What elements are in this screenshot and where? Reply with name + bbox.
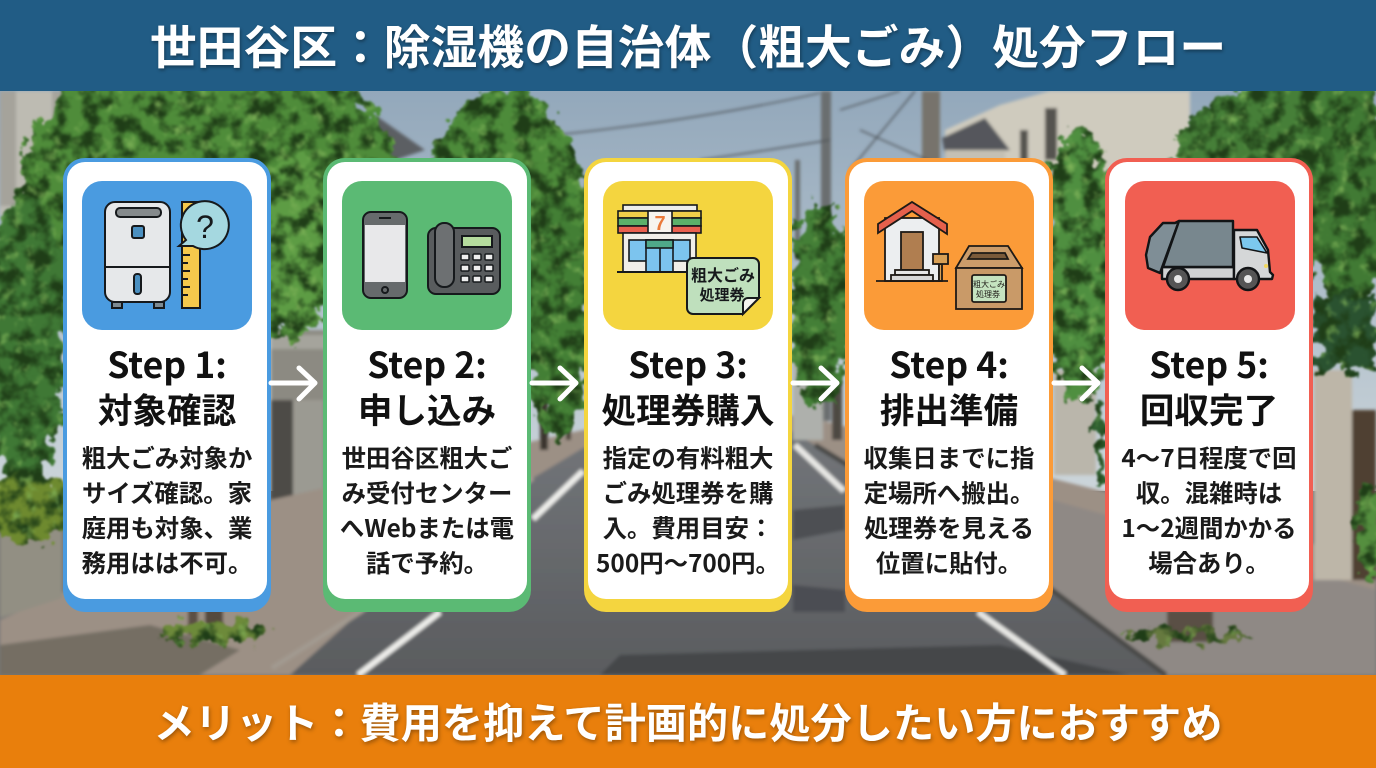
right wall	[1314, 370, 1352, 580]
step description: サイズ確認。家	[82, 475, 252, 510]
icon: dehumidifier, ruler and question bubble: ?	[196, 209, 214, 245]
step name: 排出準備	[880, 383, 1018, 433]
background photo: residential street	[0, 91, 1376, 675]
step name: 申し込み	[358, 383, 496, 433]
icon: convenience store and ticket	[603, 181, 773, 330]
step description: へWebまたは電	[340, 510, 514, 545]
left buildings	[0, 91, 52, 216]
step heading: Step 4:	[889, 338, 1009, 389]
title banner	[0, 0, 1376, 91]
step description: ごみ処理券を購	[603, 475, 773, 510]
ground: sidewalks	[0, 415, 1376, 675]
arrow: step 2 to 3	[530, 366, 578, 402]
trunks	[188, 605, 198, 635]
step description: 収。混雑時は	[1136, 475, 1282, 510]
step description: み受付センター	[342, 475, 512, 510]
step heading: Step 1:	[107, 338, 227, 389]
icon: house and box with ticket: 処理券	[976, 289, 1000, 300]
step description: 500円～700円。	[596, 545, 780, 580]
step description: 入。費用目安：	[603, 510, 773, 545]
right buildings	[945, 91, 1190, 210]
panel: step 1	[63, 158, 271, 612]
icon: smartphone and desk phone	[342, 181, 512, 330]
step description: 粗大ごみ対象か	[82, 440, 252, 475]
step name: 処理券購入	[602, 383, 774, 433]
road shadows	[793, 505, 845, 540]
step name: 対象確認	[98, 383, 236, 433]
panel: step 2	[323, 158, 531, 612]
step description: 話で予約。	[366, 545, 488, 580]
step description	[340, 440, 514, 580]
icon: convenience store and ticket: 7	[654, 213, 666, 235]
road	[290, 425, 1166, 675]
icon: convenience store and ticket: 処理券	[699, 284, 745, 305]
icon: dehumidifier, ruler and question bubble	[82, 181, 252, 330]
step description	[82, 440, 252, 580]
icon: house and box with ticket: 粗大ごみ	[973, 279, 1005, 290]
icon: convenience store and ticket: 粗大ごみ	[691, 262, 755, 286]
merit banner	[0, 675, 1376, 768]
step description: 位置に貼付。	[876, 545, 1022, 580]
step heading: Step 5:	[1149, 338, 1269, 389]
step description: 定場所へ搬出。	[864, 475, 1034, 510]
arrow: step 4 to 5	[1052, 366, 1100, 402]
icon: house and box with ticket	[864, 181, 1034, 330]
panel: step 5	[1105, 158, 1313, 612]
road lines	[358, 471, 583, 675]
step description: 収集日までに指	[864, 440, 1034, 475]
step description: 庭用も対象、業	[82, 510, 252, 545]
step heading: Step 3:	[628, 338, 748, 389]
arrow: step 1 to 2	[268, 366, 318, 402]
step description	[596, 440, 780, 580]
step description: 処理券を見える	[864, 510, 1034, 545]
title banner: 世田谷区：除湿機の自治体（粗大ごみ）処分フロー	[150, 11, 1226, 78]
merit banner: メリット：費用を抑えて計画的に処分したい方におすすめ	[154, 690, 1222, 750]
step description: 1～2週間かかる	[1121, 510, 1297, 545]
step description: 指定の有料粗大	[603, 440, 773, 475]
panel: step 3	[584, 158, 792, 612]
step description: 場合あり。	[1148, 545, 1270, 580]
foliage	[0, 40, 1376, 643]
arrow: step 3 to 4	[790, 366, 840, 402]
utility poles and wires	[821, 91, 831, 421]
step description	[864, 440, 1034, 580]
wall left	[0, 515, 62, 618]
step description: 世田谷区粗大ご	[342, 440, 512, 475]
panel: step 4	[845, 158, 1053, 612]
step heading: Step 2:	[367, 338, 487, 389]
icon: garbage truck	[1125, 181, 1295, 330]
step name: 回収完了	[1140, 383, 1278, 433]
step description: 4～7日程度で回	[1121, 440, 1297, 475]
step description: 務用はは不可。	[82, 545, 252, 580]
step description	[1121, 440, 1297, 580]
